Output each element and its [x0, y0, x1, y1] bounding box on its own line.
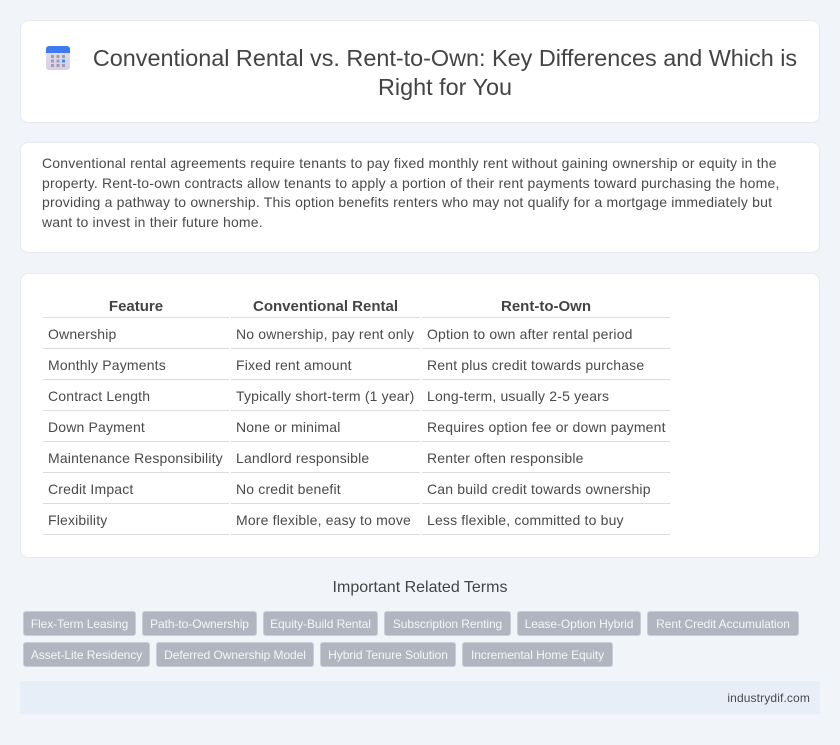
text: No ownership, pay rent only	[236, 326, 414, 342]
text: Credit Impact	[48, 481, 133, 497]
header: conventional rental: Conventional Rental	[253, 298, 398, 315]
tag: Hybrid Tenure Solution	[328, 648, 448, 662]
tag: Equity-Build Rental	[270, 617, 371, 631]
summary text: providing a pathway to ownership. This option benefits renters who may not qualify for a mortgage immediately but	[42, 194, 772, 210]
tag	[23, 611, 136, 636]
tag: Incremental Home Equity	[471, 648, 604, 662]
header: feature: Feature	[109, 298, 163, 315]
table card	[20, 273, 820, 558]
text: Down Payment	[48, 419, 145, 435]
text: Ownership	[48, 326, 116, 342]
summary text: property. Rent-to-own contracts allow tenants to apply a portion of their rent payments toward purchasing the home,	[42, 174, 780, 190]
tag: Deferred Ownership Model	[164, 648, 306, 662]
tag: Asset-Lite Residency	[31, 648, 142, 662]
tag	[142, 611, 257, 636]
tag	[384, 611, 511, 636]
row: ownership	[43, 326, 670, 349]
tag	[320, 642, 456, 667]
text: Landlord responsible	[236, 450, 369, 466]
tag: Lease-Option Hybrid	[525, 617, 633, 631]
related terms tags	[23, 611, 799, 667]
header: rent-to-own	[422, 287, 670, 318]
text: Requires option fee or down payment	[427, 419, 666, 435]
text: Renter often responsible	[427, 450, 584, 466]
tag	[517, 611, 641, 636]
row: credit impact	[43, 481, 670, 504]
text: Long-term, usually 2-5 years	[427, 388, 609, 404]
text: More flexible, easy to move	[236, 512, 411, 528]
icon: calendar	[46, 46, 70, 70]
footer bar	[20, 681, 820, 714]
row: contract length	[43, 388, 670, 411]
text: Less flexible, committed to buy	[427, 512, 624, 528]
title card	[20, 20, 820, 123]
comparison table	[43, 298, 670, 535]
text: Fixed rent amount	[236, 357, 352, 373]
text: Rent plus credit towards purchase	[427, 357, 644, 373]
tag	[156, 642, 314, 667]
related terms heading: Important Related Terms	[333, 579, 507, 596]
row: maintenance responsibility	[43, 450, 670, 473]
text: Can build credit towards ownership	[427, 481, 651, 497]
tag	[263, 611, 378, 636]
tag	[462, 642, 613, 667]
footer source: industrydif.com	[727, 691, 810, 705]
tag: Flex-Term Leasing	[31, 617, 128, 631]
tag: Rent Credit Accumulation	[656, 617, 790, 631]
summary text: Conventional rental agreements require tenants to pay fixed monthly rent without gaining ownership or equity in the	[42, 155, 777, 171]
text: Monthly Payments	[48, 357, 166, 373]
text: Contract Length	[48, 388, 150, 404]
text: Flexibility	[48, 512, 107, 528]
text: None or minimal	[236, 419, 340, 435]
row: monthly payments	[43, 357, 670, 380]
title: Conventional Rental vs. Rent-to-Own: Key Differences and Which is Right for You	[93, 45, 797, 100]
tag	[23, 642, 150, 667]
row: flexibility	[43, 512, 670, 535]
summary text: want to invest in their future home.	[42, 214, 263, 230]
text: Typically short-term (1 year)	[236, 388, 414, 404]
header: feature	[43, 287, 229, 318]
header: conventional rental	[231, 287, 420, 318]
summary text	[42, 155, 780, 230]
tag: Path-to-Ownership	[150, 617, 249, 631]
tag: Subscription Renting	[393, 617, 502, 631]
row: down payment	[43, 419, 670, 442]
header: rent-to-own: Rent-to-Own	[501, 298, 591, 315]
summary card	[20, 142, 820, 253]
text: Option to own after rental period	[427, 326, 633, 342]
tag	[647, 611, 799, 636]
text: Maintenance Responsibility	[48, 450, 223, 466]
text: No credit benefit	[236, 481, 341, 497]
